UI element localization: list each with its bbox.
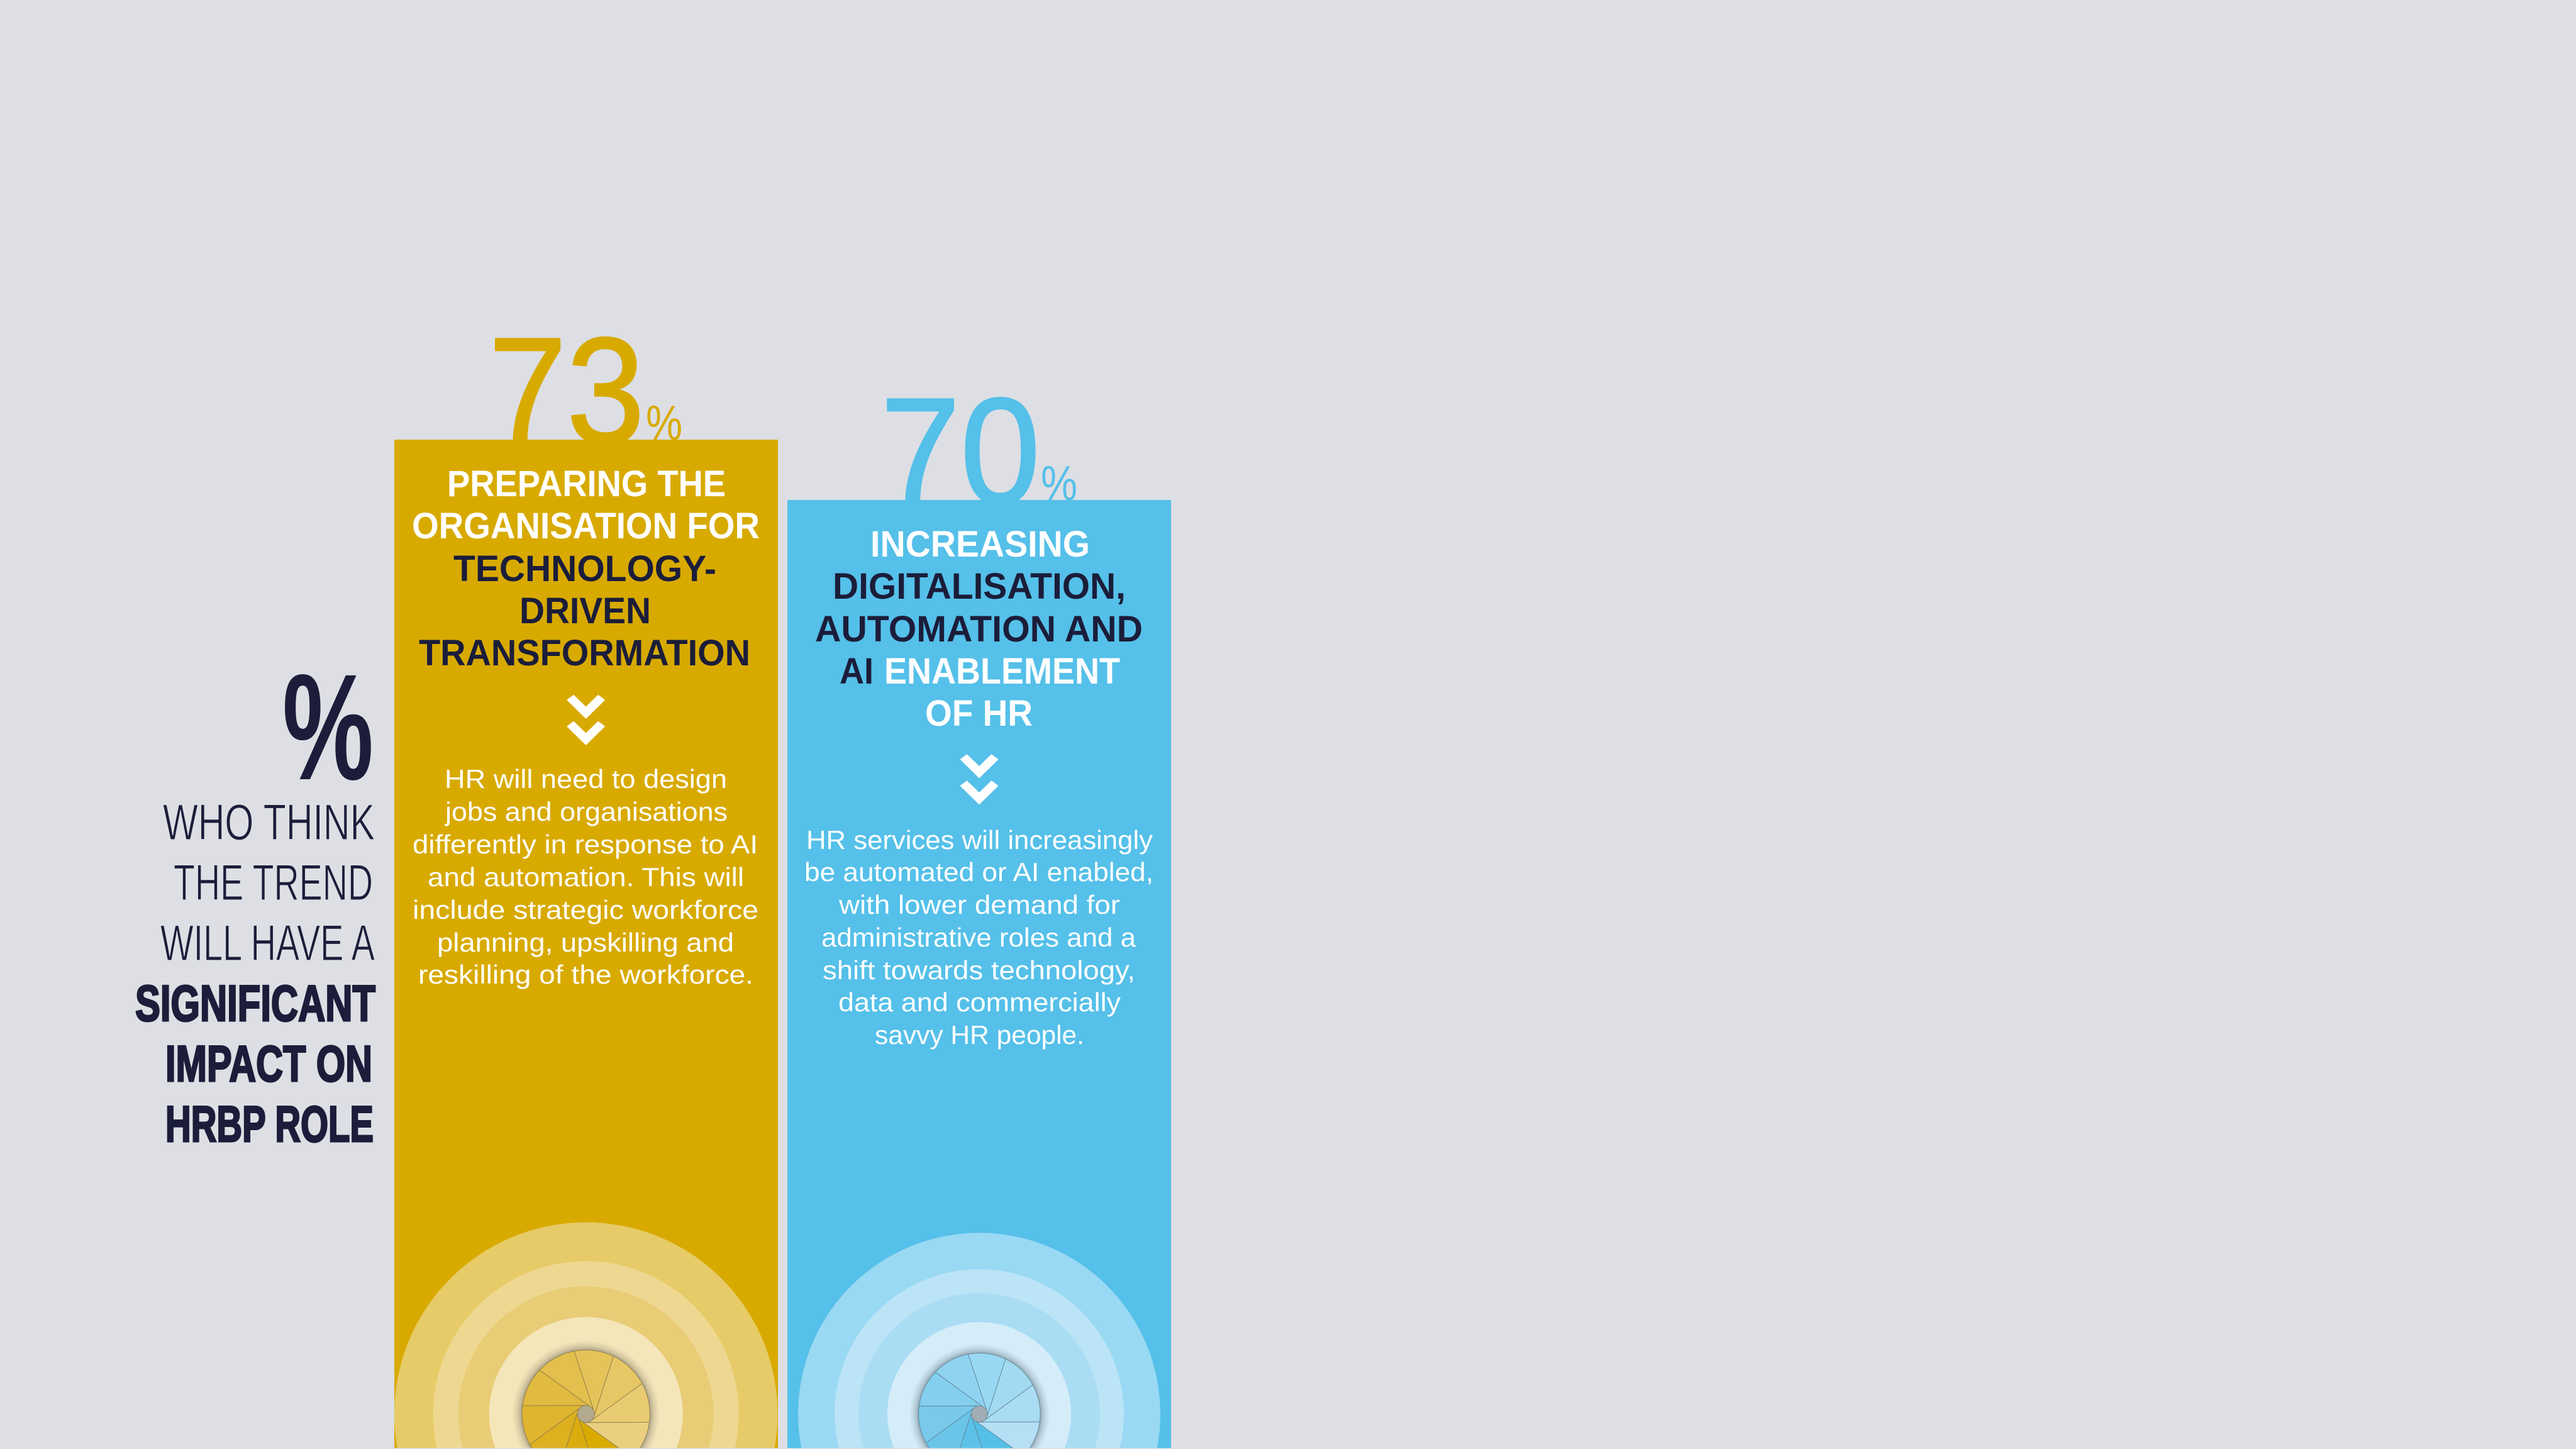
- body text: include strategic workforce: [413, 895, 758, 924]
- body text: be automated or AI enabled,: [804, 857, 1153, 887]
- heading: preparing the organisation: DRIVEN: [519, 591, 651, 631]
- heading: preparing the organisation: PREPARING THE: [447, 464, 726, 504]
- bold caption lines: HRBP ROLE: [165, 1096, 374, 1153]
- heading: increasing digitalisation: AI: [840, 651, 874, 692]
- stat: 70 percent: 70: [880, 367, 1040, 535]
- heading: increasing digitalisation: [815, 524, 1143, 734]
- body text: [804, 825, 1153, 1050]
- body text: [413, 764, 758, 989]
- heading: increasing digitalisation: INCREASING: [870, 524, 1090, 565]
- body text: planning, upskilling and: [437, 928, 734, 957]
- body text: savvy HR people.: [875, 1020, 1084, 1050]
- panel: digitalisation of HR: [787, 500, 1171, 1448]
- stat: 73 percent: 73: [489, 306, 645, 475]
- body text: reskilling of the workforce.: [418, 960, 753, 989]
- body text: with lower demand for: [838, 890, 1120, 919]
- heading: increasing digitalisation: OF HR: [925, 693, 1033, 734]
- stat: 73 percent: %: [646, 395, 682, 450]
- concentric rings: [394, 1223, 777, 1448]
- large percent sign: %: [282, 643, 374, 811]
- heading: preparing the organisation: TECHNOLOGY-: [453, 548, 716, 589]
- light caption lines: [160, 794, 375, 972]
- icon: double chevron: [961, 755, 997, 804]
- bold caption lines: IMPACT ON: [165, 1036, 372, 1092]
- body text: and automation. This will: [428, 862, 744, 892]
- body text: data and commercially: [838, 987, 1121, 1017]
- percent heading column: [135, 643, 375, 1153]
- body text: jobs and organisations: [444, 797, 728, 826]
- heading: increasing digitalisation: DIGITALISATION,: [833, 566, 1126, 607]
- light caption lines: WHO THINK: [163, 794, 375, 851]
- bold caption lines: SIGNIFICANT: [135, 975, 375, 1032]
- heading: increasing digitalisation: AUTOMATION AND: [815, 609, 1143, 650]
- icon: iris wheel: [512, 1340, 660, 1448]
- heading: increasing digitalisation: ENABLEMENT: [884, 651, 1120, 692]
- body text: HR will need to design: [445, 764, 727, 794]
- icon: double chevron: [567, 696, 604, 745]
- heading: preparing the organisation: TRANSFORMATION: [419, 633, 750, 674]
- heading: preparing the organisation: [412, 464, 760, 674]
- stat: 70 percent: %: [1041, 455, 1077, 511]
- panel: organisation transformation: [394, 440, 778, 1448]
- body text: shift towards technology,: [823, 955, 1135, 985]
- body text: differently in response to AI: [413, 830, 758, 859]
- body text: HR services will increasingly: [806, 825, 1153, 855]
- light caption lines: WILL HAVE A: [160, 915, 375, 972]
- heading: preparing the organisation: ORGANISATION FOR: [412, 506, 760, 547]
- icon: iris wheel: [909, 1344, 1050, 1448]
- concentric rings: [798, 1233, 1160, 1448]
- bold caption lines: [135, 975, 375, 1153]
- light caption lines: THE TREND: [174, 855, 373, 911]
- body text: administrative roles and a: [821, 923, 1136, 952]
